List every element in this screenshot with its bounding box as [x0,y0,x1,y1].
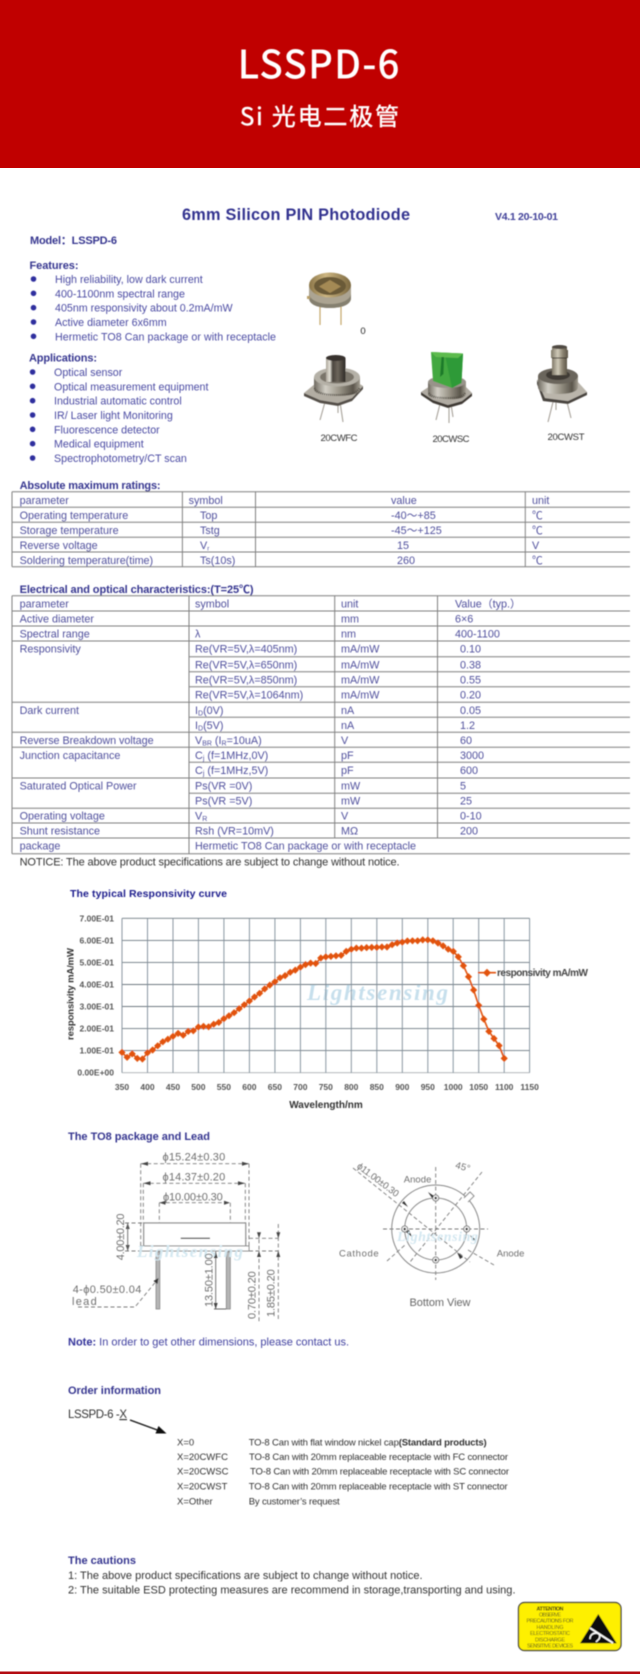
responsivity line chart: 4.00E-01 [80,980,114,990]
table: electrical and optical characteristics: 0.20 [460,689,481,701]
table: absolute maximum ratings: value [391,495,417,507]
table: electrical and optical characteristics: 1.2 [460,720,475,732]
table: electrical and optical characteristics: 400-1100 [455,629,500,641]
table: electrical and optical characteristics: Active diameter [20,614,94,626]
table: absolute maximum ratings [12,492,630,567]
responsivity line chart: 600 [242,1082,257,1092]
table: absolute maximum ratings: Soldering temperature(time) [20,555,153,567]
table: electrical and optical characteristics: mm [341,614,359,626]
applications list: Fluorescence detector [54,424,160,436]
package side-view drawing: 1.85±0.20 [266,1269,278,1317]
table: electrical and optical characteristics: mW [341,781,361,793]
table: electrical and optical characteristics: (f=1MHz,0V) [204,750,268,762]
table: electrical and optical characteristics: 6×6 [455,614,473,626]
bottom red bar [0,1672,640,1674]
product photo: 20CWSC [421,352,472,423]
table: electrical and optical characteristics: nA [341,705,355,717]
table: electrical and optical characteristics: Ps(VR =5V) [195,796,252,808]
table: electrical and optical characteristics: 600 [460,765,478,777]
product photo: flat window can [307,272,351,325]
chart watermark: Lightsensing [306,980,448,1005]
arrow [130,1420,166,1434]
y axis title: responsivity mA/mW [66,948,76,1040]
table: electrical and optical characteristics: Junction capacitance [20,750,120,762]
caption: bottom view: Bottom View [410,1297,471,1309]
order options: X=20CWST [177,1481,228,1492]
table: electrical and optical characteristics: Re(VR=5V,λ=405nm) [195,644,297,656]
features list: Hermetic TO8 Can package or with receptacle [55,331,276,343]
table: absolute maximum ratings: Ts(10s) [200,555,235,567]
table: electrical and optical characteristics: Rsh (VR=10mV) [195,826,274,838]
package side-view drawing: lead [72,1296,97,1308]
model line: Model：LSSPD-6 [30,235,117,247]
order options: TO-8 Can with 20mm replaceable receptacle with FC connector [249,1452,508,1463]
cautions text: 2: The suitable ESD protecting measures are recommend in storage,transporting and using. [68,1585,516,1597]
ESD triangle icon [580,1614,617,1643]
responsivity line chart: 5.00E-01 [80,957,114,967]
responsivity line chart: 7.00E-01 [80,913,114,923]
x axis title: Wavelength/nm [289,1100,363,1111]
table: electrical and optical characteristics: mA/mW [341,674,380,686]
cautions text: 1: The above product specifications are subject to change without notice. [68,1570,422,1582]
features list: Features: [30,260,78,272]
order options: X=20CWSC [177,1467,229,1478]
features list: 405nm responsivity about 0.2mA/mW [55,303,234,315]
table: electrical and optical characteristics: 0.10 [460,644,481,656]
table: electrical and optical characteristics: V [341,735,349,747]
features list: Active diameter 6x6mm [55,317,167,329]
ESD warning label: DISCHARGE [535,1637,565,1643]
table: absolute maximum ratings: Storage temperature [20,525,119,537]
package side-view drawing: 13.50±1.00 [204,1253,216,1307]
applications list: Industrial automatic control [54,396,182,408]
package side-view drawing [72,1152,280,1322]
product photo: 20CWFC [304,355,363,422]
bottom view drawing: Anode [497,1248,525,1260]
responsivity line chart: 1100 [495,1082,514,1092]
responsivity line chart: 0.00E+00 [77,1068,114,1078]
table: electrical and optical characteristics: symbol [195,599,229,611]
package side-view drawing: ϕ10.00±0.30 [163,1192,223,1204]
table: electrical and optical characteristics: I [195,720,198,732]
applications list: Optical measurement equipment [54,381,208,393]
features list: 400-1100nm spectral range [55,288,185,300]
applications list: Applications: [29,353,97,365]
table: electrical and optical characteristics: package [20,841,60,853]
responsivity line chart: 900 [395,1082,410,1092]
responsivity line chart: 6.00E-01 [80,935,114,945]
ESD warning label: OBSERVE [539,1613,561,1619]
table: electrical and optical characteristics: mW [341,796,361,808]
ESD warning label: ELECTROSTATIC [530,1631,570,1637]
header band [0,0,640,168]
responsivity line chart: 500 [191,1082,206,1092]
applications list: Optical sensor [54,367,123,379]
responsivity line chart: 650 [268,1082,282,1092]
ESD warning label: PRECAUTIONS FOR [526,1619,574,1625]
responsivity line chart [66,913,589,1111]
table: electrical and optical characteristics: mA/mW [341,644,380,656]
ESD warning label: ATTENTION [536,1607,564,1613]
version and date: V4.1 20-10-01 [495,211,558,223]
table: electrical and optical characteristics: R [222,740,227,748]
side-view watermark: Lightsensing [136,1242,244,1261]
order options: X=20CWFC [177,1452,228,1463]
features list: High reliability, low dark current [55,274,203,286]
heading: electrical and optical characteristics: Electrical and optical characteristics:(T=25℃) [20,584,254,596]
order options: X=Other [177,1496,213,1507]
ESD warning label: HANDLING [536,1625,564,1631]
table: electrical and optical characteristics: Saturated Optical Power [20,781,137,793]
table: electrical and optical characteristics: Ps(VR =0V) [195,781,252,793]
table: absolute maximum ratings: V [532,540,540,552]
responsivity line chart: 550 [217,1082,231,1092]
datasheet title: 6mm Silicon PIN Photodiode [182,206,410,224]
table: electrical and optical characteristics: V [341,811,349,823]
applications list: Spectrophotometry/CT scan [54,453,187,465]
bottom view drawing: Anode [404,1174,432,1186]
table: absolute maximum ratings: 260 [397,555,415,567]
responsivity line chart: 800 [344,1082,359,1092]
responsivity line chart: 950 [421,1082,435,1092]
responsivity line chart: 450 [166,1082,180,1092]
table: absolute maximum ratings: parameter [20,495,69,507]
table: electrical and optical characteristics: (f=1MHz,5V) [204,765,268,777]
table: electrical and optical characteristics: BR [202,740,212,748]
table: electrical and optical characteristics: V [195,735,202,747]
table: electrical and optical characteristics: (I [212,735,222,747]
order options: By customer’s request [249,1496,340,1507]
table: electrical and optical characteristics: mA/mW [341,689,380,701]
subtitle: Si 光电二极管 [240,97,399,132]
heading: responsivity curve: The typical Responsivity curve [70,888,227,900]
table: electrical and optical characteristics: j [202,770,205,778]
table: absolute maximum ratings: unit [532,495,549,507]
table: electrical and optical characteristics: I [195,705,198,717]
responsivity line chart: 1150 [520,1082,539,1092]
table: electrical and optical characteristics: Re(VR=5V,λ=850nm) [195,674,297,686]
table: electrical and optical characteristics: R [202,816,207,823]
package side-view drawing: 0.70±0.20 [246,1271,258,1319]
table: electrical and optical characteristics: pF [341,765,354,777]
table: electrical and optical characteristics: mA/mW [341,659,380,671]
main title: LSSPD-6 [238,34,399,89]
label: 0: 0 [360,326,366,337]
table: absolute maximum ratings: Top [200,510,217,522]
table: absolute maximum ratings: -40～+85 [391,510,436,522]
table: electrical and optical characteristics: Re(VR=5V,λ=1064nm) [195,689,303,701]
table: electrical and optical characteristics: 60 [460,735,472,747]
package side-view drawing: ϕ15.24±0.30 [162,1152,226,1164]
table: electrical and optical characteristics: 0-10 [460,811,482,823]
bottom view drawing: ϕ11.00±0.30 [354,1161,401,1200]
label: 20CWSC: 20CWSC [432,434,470,445]
table: electrical and optical characteristics: 0.38 [460,659,481,671]
order code: LSSPD-6 -X [68,1409,127,1421]
table: electrical and optical characteristics: parameter [20,599,69,611]
responsivity line chart: 3.00E-01 [80,1002,114,1012]
table: electrical and optical characteristics [12,596,630,854]
order options [177,1437,509,1507]
table: electrical and optical characteristics: Reverse Breakdown voltage [20,735,154,747]
table: absolute maximum ratings: 15 [397,540,409,552]
table: absolute maximum ratings: Operating temperature [20,510,128,522]
table: electrical and optical characteristics: Operating voltage [20,811,105,823]
table: electrical and optical characteristics: 5 [460,781,466,793]
table: electrical and optical characteristics: Responsivity [20,644,81,656]
heading: TO8 package: The TO8 package and Lead [68,1131,210,1143]
cautions text [68,1570,516,1597]
responsivity line chart: 350 [115,1082,129,1092]
applications list: Medical equipment [54,439,144,451]
table: electrical and optical characteristics: Hermetic TO8 Can package or with receptacle [195,841,416,853]
table: electrical and optical characteristics: Re(VR=5V,λ=650nm) [195,659,297,671]
heading: order information: Order information [68,1385,161,1397]
responsivity line chart: 400 [140,1082,155,1092]
table: absolute maximum ratings: r [207,546,209,552]
responsivity line chart: 700 [293,1082,308,1092]
table: absolute maximum ratings: ℃ [532,510,543,522]
ESD warning label: SENSITIVE DEVICES [527,1644,573,1650]
table: absolute maximum ratings: symbol [189,495,223,507]
label: 20CWST: 20CWST [548,432,585,443]
responsivity line chart: 1050 [469,1082,488,1092]
order options: TO-8 Can with 20mm replaceable receptacle with ST connector [249,1481,508,1492]
table: electrical and optical characteristics: j [202,756,205,762]
responsivity line chart: 850 [370,1082,384,1092]
table: electrical and optical characteristics: D [198,726,203,732]
table: electrical and optical characteristics: 3000 [460,750,484,762]
order options: TO-8 Can with flat window nickel cap(Standard products) [249,1437,487,1448]
applications list: IR/ Laser light Monitoring [54,410,173,422]
applications list [29,353,208,465]
table: electrical and optical characteristics: 0.05 [460,705,481,717]
table: electrical and optical characteristics: 200 [460,826,478,838]
package side-view drawing: ϕ14.37±0.20 [162,1172,226,1184]
dimensions note: Note: In order to get other dimensions, please contact us. [68,1336,349,1348]
bottom view drawing: 45° [454,1160,472,1175]
notice: NOTICE: The above product specifications are subject to change without notice. [20,857,400,869]
table: electrical and optical characteristics: nA [341,720,355,732]
ESD warning label [518,1602,621,1650]
table: electrical and optical characteristics: Shunt resistance [20,826,100,838]
table: absolute maximum ratings: Reverse voltage [20,540,98,552]
label: 20CWFC: 20CWFC [320,433,358,444]
responsivity line chart: 1000 [444,1082,463,1092]
table: electrical and optical characteristics: D [198,710,203,718]
bottom view drawing [339,1160,525,1309]
table: electrical and optical characteristics: Value（typ.） [455,598,521,611]
package side-view drawing: 4-ϕ0.50±0.04 [73,1284,142,1296]
table: electrical and optical characteristics: (5V) [203,720,223,732]
table: electrical and optical characteristics: pF [341,750,354,762]
table: electrical and optical characteristics: V [195,811,202,823]
table: electrical and optical characteristics: 25 [460,796,472,808]
table: electrical and optical characteristics: C [195,765,203,777]
table: electrical and optical characteristics: 0.55 [460,674,481,686]
package side-view drawing: 4.00±0.20 [115,1213,127,1260]
bottom view drawing: Cathode [339,1248,379,1260]
responsivity line chart: 1.00E-01 [80,1046,114,1056]
order options: TO-8 Can with 20mm replaceable receptacle with SC connector [250,1467,509,1478]
table: electrical and optical characteristics: λ [195,629,201,641]
table: electrical and optical characteristics: =10uA) [227,735,262,747]
responsivity line chart: 750 [319,1082,333,1092]
table: electrical and optical characteristics: MΩ [341,826,358,838]
table: electrical and optical characteristics: C [195,750,203,762]
table: electrical and optical characteristics: (0V) [203,705,223,717]
product photo: 20CWST [537,345,587,422]
heading: cautions: The cautions [68,1555,136,1567]
table: electrical and optical characteristics: nm [341,629,356,641]
chart legend: responsivity mA/mW [497,968,589,979]
table: electrical and optical characteristics: Dark current [20,705,79,717]
bottom-view watermark: Lightsensing [396,1230,478,1245]
table: absolute maximum ratings: ℃ [532,525,543,537]
features list [30,260,276,343]
table: electrical and optical characteristics: Spectral range [20,629,90,641]
order options: X=0 [177,1437,194,1448]
heading: absolute maximum ratings: Absolute maximum ratings: [20,480,161,492]
responsivity line chart: 2.00E-01 [80,1024,114,1034]
table: electrical and optical characteristics: unit [341,599,358,611]
table: absolute maximum ratings: -45～+125 [391,525,442,537]
table: absolute maximum ratings: V [200,540,207,552]
table: absolute maximum ratings: ℃ [532,555,543,567]
table: absolute maximum ratings: Tstg [200,525,220,537]
